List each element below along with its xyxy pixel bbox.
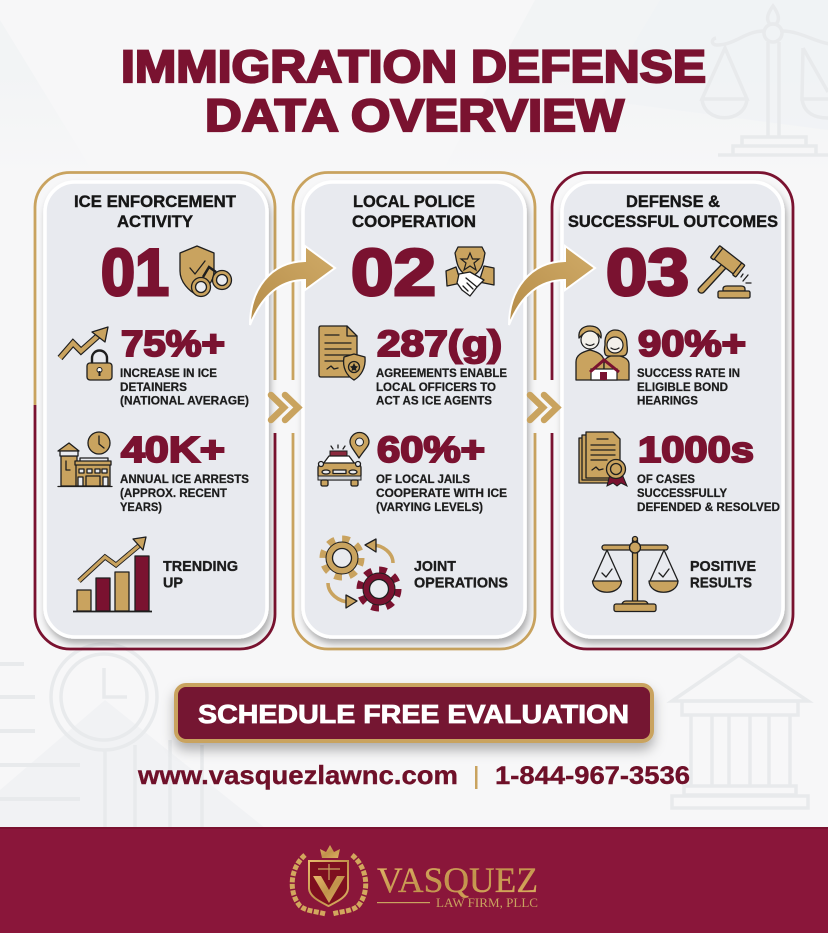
stat: 75%+: (NATIONAL AVERAGE) xyxy=(120,394,249,408)
stat: 287(g): LOCAL OFFICERS TO xyxy=(376,380,496,394)
stat: 40K+: (APPROX. RECENT xyxy=(120,486,227,500)
icon: detention building and clock xyxy=(58,432,112,486)
stat: 75%+: INCREASE IN ICE xyxy=(120,366,217,380)
stat: 40K+: ANNUAL ICE ARRESTS xyxy=(120,472,249,486)
footer band xyxy=(0,827,828,933)
icon: gears and cycle arrows xyxy=(323,539,398,608)
stat: 1000s: SUCCESSFULLY xyxy=(637,486,728,500)
stat: 287(g): 287(g) xyxy=(377,323,502,364)
stat: 40K+: 40K+ xyxy=(121,429,225,470)
heading: ICE ENFORCEMENT xyxy=(74,193,236,211)
icon: family and house xyxy=(576,326,629,380)
logo: crest xyxy=(292,845,366,914)
panel: local police cooperation xyxy=(293,172,535,649)
stat: 60%+: (VARYING LEVELS) xyxy=(376,500,483,514)
logo: firm name: VASQUEZ xyxy=(377,860,538,900)
chevrons: panel 2 to panel 3 xyxy=(530,395,557,420)
stat: 60%+: COOPERATE WITH ICE xyxy=(376,486,507,500)
stat: 60%+ xyxy=(376,429,507,514)
stat: 90%+: HEARINGS xyxy=(637,394,698,408)
stat: 90%+ xyxy=(637,323,746,408)
heading xyxy=(74,193,236,231)
watermark: courthouse columns xyxy=(672,655,808,808)
heading: LOCAL POLICE xyxy=(353,193,475,211)
icon: police badge and handshake xyxy=(446,247,494,296)
icon: bar chart trending up xyxy=(73,537,152,612)
stat: 1000s: 1000s xyxy=(638,429,754,470)
number 02: 02 xyxy=(351,235,436,309)
icon: gavel xyxy=(698,246,751,298)
logo: firm name: LAW FIRM, PLLC xyxy=(436,895,538,910)
heading: COOPERATION xyxy=(352,213,476,231)
stat: 75%+: DETAINERS xyxy=(120,380,187,394)
title: IMMIGRATION DEFENSE xyxy=(121,41,706,92)
stat: 90%+: SUCCESS RATE IN xyxy=(637,366,740,380)
stat: 40K+ xyxy=(120,429,249,514)
label: trending up: TRENDING xyxy=(163,558,238,575)
stat: 60%+: OF LOCAL JAILS xyxy=(376,472,470,486)
heading xyxy=(568,193,778,231)
stat: 287(g): ACT AS ICE AGENTS xyxy=(376,394,492,408)
watermark: scales of justice xyxy=(702,6,828,155)
stat: 90%+: 90%+ xyxy=(638,323,746,364)
call to action button xyxy=(176,685,652,741)
label: positive results xyxy=(690,558,756,592)
stat: 75%+: 75%+ xyxy=(121,323,225,364)
stat: 1000s: OF CASES xyxy=(637,472,695,486)
heading xyxy=(352,193,476,231)
contact line: www.vasquezlawnc.com xyxy=(137,760,458,790)
contact line xyxy=(137,760,690,790)
stat: 287(g): AGREEMENTS ENABLE xyxy=(376,366,507,380)
stat: 287(g) xyxy=(376,323,507,408)
contact line: 1-844-967-3536 xyxy=(495,762,690,790)
call to action button: SCHEDULE FREE EVALUATION xyxy=(198,699,629,729)
heading: DEFENSE & xyxy=(626,193,720,211)
label: trending up xyxy=(163,558,238,592)
arrow: panel 1 to panel 2 xyxy=(250,246,335,325)
arrow: panel 2 to panel 3 xyxy=(509,246,595,325)
number 03: 03 xyxy=(606,235,689,309)
icon: shield and handcuffs xyxy=(180,246,232,296)
stat: 1000s: DEFENDED & RESOLVED xyxy=(637,500,780,514)
icon: document with badge xyxy=(319,326,365,380)
number 01: 01 xyxy=(101,235,169,309)
stat: 1000s xyxy=(637,429,780,514)
stat: 60%+: 60%+ xyxy=(377,429,485,470)
label: joint operations xyxy=(414,558,508,592)
stat: 90%+: ELIGIBLE BOND xyxy=(637,380,728,394)
watermark: clock and lines xyxy=(0,644,202,828)
icon: balance scales xyxy=(592,536,678,612)
label: positive results: RESULTS xyxy=(690,574,752,592)
title xyxy=(121,41,706,141)
icon: rising arrow and padlock xyxy=(60,327,112,380)
label: positive results: POSITIVE xyxy=(690,558,756,575)
stat: 40K+: YEARS) xyxy=(120,500,162,514)
icon: certificate stack with seal xyxy=(579,432,627,486)
panel: defense and successful outcomes xyxy=(552,172,793,649)
label: joint operations: OPERATIONS xyxy=(414,574,508,592)
stat: 75%+ xyxy=(120,323,249,408)
heading: ACTIVITY xyxy=(117,213,193,231)
title: DATA OVERVIEW xyxy=(205,90,625,141)
label: joint operations: JOINT xyxy=(414,558,456,575)
label: trending up: UP xyxy=(163,574,183,592)
heading: SUCCESSFUL OUTCOMES xyxy=(568,213,778,231)
chevrons: panel 1 to panel 2 xyxy=(271,395,298,420)
panel: ICE enforcement activity xyxy=(35,172,275,649)
icon: police car and location pin xyxy=(318,433,369,486)
